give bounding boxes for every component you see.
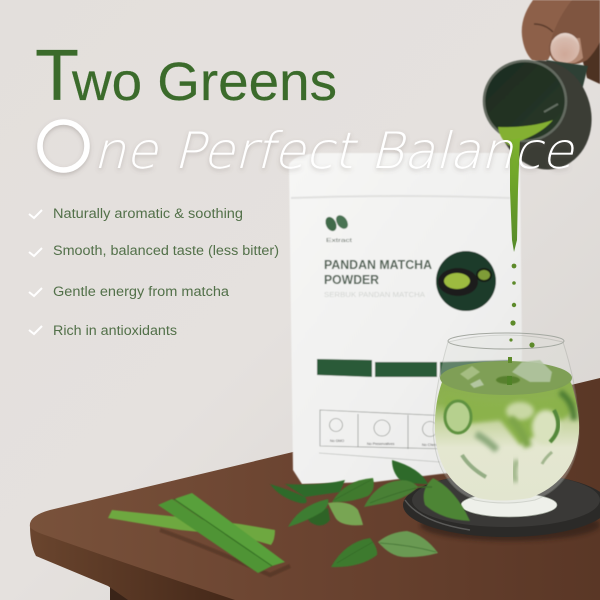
matcha bowl photo [436,251,496,311]
pouch body [289,153,522,484]
hand [522,0,600,84]
matcha pitcher [484,50,600,180]
thumb [549,0,600,65]
badge table [319,410,450,462]
upper leaf [392,460,428,484]
brand logo [323,213,353,244]
pitcher rim [484,61,566,141]
matcha liquid in pitcher [498,120,553,146]
brand logo: Extract [326,238,353,244]
title line one [35,36,337,116]
pitcher body [484,50,600,180]
glass base [461,493,557,517]
glass rim [448,333,564,349]
thumb tip [551,38,583,64]
ice cube centre [506,402,534,420]
lower swirl [462,455,486,477]
badge table: No GMO [330,439,344,443]
pour stream [510,138,520,252]
floating ice highlights [460,366,520,388]
lower centre streak [514,460,517,482]
benefits list [29,206,279,338]
bottom left leaf [331,538,377,567]
soft swirl [476,434,497,450]
left leaf [288,499,328,527]
big middle leaf [332,478,374,502]
product subtitle: SERBUK PANDAN MATCHA [324,290,425,299]
finger crease [534,24,553,32]
green label bars [317,359,510,377]
ice cube [512,360,552,382]
horizontal pandan strip [108,510,275,545]
drops [507,264,535,385]
benefit two: Smooth, balanced taste (less bitter) [53,243,279,258]
matcha drink [435,361,579,500]
title line two: ne Perfect Balance [93,122,575,180]
bottom right leaf [378,531,438,557]
palm shadow [580,40,600,84]
green swirl centre [510,418,528,447]
badge table: No Chem [422,443,437,447]
iced matcha glass [433,333,579,517]
benefit three: Gentle energy from matcha [53,284,230,299]
dark under leaf [305,508,330,526]
thumbnail [547,30,583,66]
product name: PANDAN MATCHA [324,258,432,272]
milk highlight [544,104,558,112]
back spike leaf [270,484,307,503]
benefit four: Rich in antioxidants [53,323,177,338]
centre leaf [364,480,418,507]
leaf by plate [424,478,470,521]
ice cube left [445,401,471,433]
pouch seam [291,196,510,198]
product pouch: POWDER [324,273,379,287]
dark top right swirl [560,392,574,420]
green band [444,395,573,445]
badge table: No Preservatives [367,442,395,446]
lower right streak [542,452,552,464]
pandan strip front [158,499,272,573]
saucer plate [403,473,600,541]
title line one: T [35,36,79,116]
product pouch [289,153,522,484]
back flat leaf [285,480,345,497]
drink surface [440,361,572,395]
glass bowl [433,335,579,503]
pandan strip back [174,493,285,566]
pale leaf [328,502,363,525]
title line one: wo Greens [71,52,337,112]
pandan fold line [174,499,272,566]
leaf stem [417,486,432,488]
handle [546,60,588,90]
marbled ice swirls [444,392,574,482]
pandan leaves [108,493,290,575]
ice cube right [532,410,560,444]
tea leaves around pouch and plate [270,460,470,567]
wooden table [30,378,600,600]
benefit one: Naturally aromatic & soothing [53,206,243,221]
big letter O [40,122,87,170]
leaf veins [334,480,436,563]
finger [522,0,572,61]
matcha pour stream and drops [507,138,535,385]
